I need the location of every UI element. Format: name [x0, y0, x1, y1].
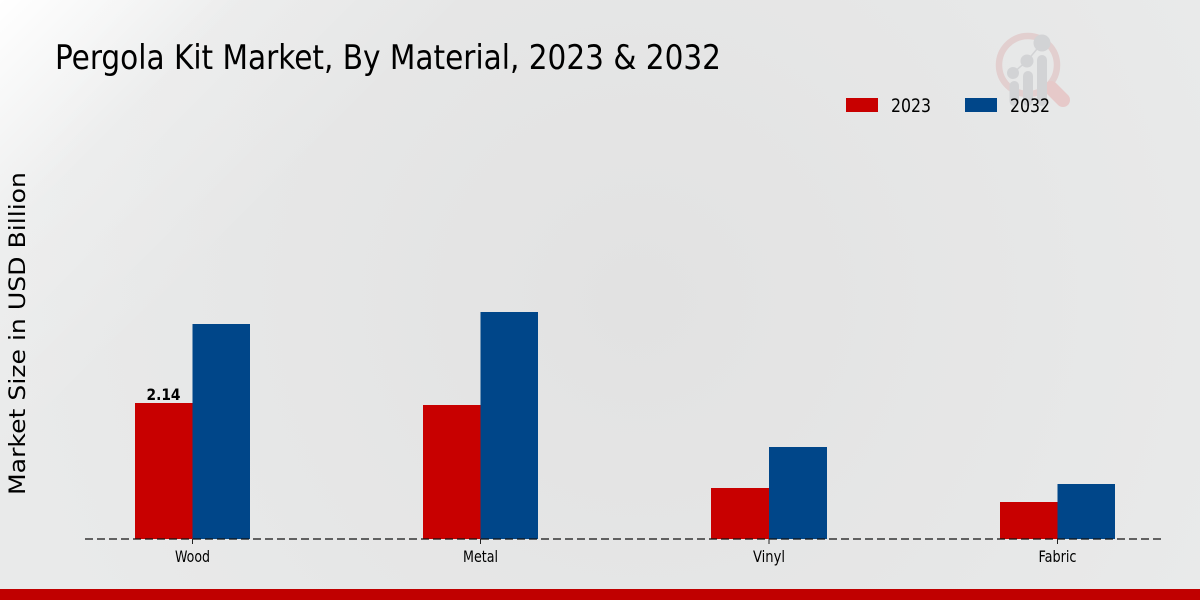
bars: Vinyl — [711, 447, 827, 539]
x axis labels — [175, 547, 1077, 566]
bars: Fabric — [1000, 484, 1115, 539]
legend: 2032 — [1010, 96, 1050, 117]
legend — [846, 96, 1050, 117]
bar chart — [85, 312, 1165, 566]
x axis line — [85, 539, 1165, 544]
x axis labels: Metal — [463, 547, 498, 566]
y axis title: Market Size in USD Billion — [5, 172, 31, 495]
bars: Metal — [423, 312, 538, 539]
x axis labels: Fabric — [1038, 547, 1077, 566]
footer bar — [0, 589, 1200, 600]
value label: Wood 2023: 2.14 — [146, 385, 180, 404]
x axis labels: Wood — [175, 547, 210, 566]
icon: watermark logo — [999, 34, 1063, 106]
bars: Wood — [135, 324, 250, 539]
legend: 2023 — [891, 96, 931, 117]
title: Pergola Kit Market, By Material, 2023 & 2032 — [55, 38, 721, 77]
x axis labels: Vinyl — [753, 547, 785, 566]
